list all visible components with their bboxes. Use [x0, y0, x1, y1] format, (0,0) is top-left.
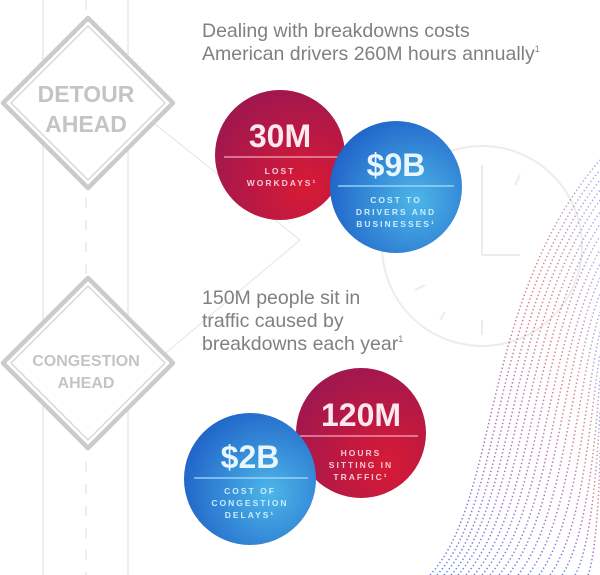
stat: 120M [296, 368, 426, 498]
sign: congestion ahead [0, 276, 176, 450]
stat: 30M: LOST [265, 166, 295, 176]
stat: 30M: WORKDAYS¹ [247, 178, 317, 188]
heading: traffic [202, 287, 403, 355]
sign: detour ahead: DETOUR [38, 81, 135, 107]
stat: $9B: COST TO [370, 195, 422, 205]
stat: 30M [215, 90, 345, 220]
heading: breakdowns cost: Dealing with breakdowns costs [202, 20, 470, 42]
stat: $9B [330, 121, 462, 253]
heading: traffic: breakdowns each year1 [202, 333, 403, 355]
stat: 120M: 120M [321, 397, 401, 433]
stat: $2B: DELAYS¹ [225, 510, 275, 520]
stat: $9B: $9B [367, 147, 425, 183]
stat: $2B [184, 413, 316, 545]
heading: breakdowns cost [202, 20, 540, 65]
dotted wave [430, 160, 600, 575]
sign: detour ahead: AHEAD [45, 111, 127, 137]
stat: 120M: TRAFFIC¹ [333, 472, 389, 482]
stat: 120M: SITTING IN [329, 460, 393, 470]
road lines [43, 0, 300, 575]
sign: detour ahead [0, 16, 176, 190]
clock face [382, 146, 582, 346]
stat: 120M: HOURS [341, 448, 381, 458]
sign: congestion ahead: CONGESTION [32, 353, 140, 370]
stat: $2B: COST OF [224, 486, 276, 496]
heading: traffic: 150M people sit in [202, 287, 360, 309]
stat: $9B: DRIVERS AND [356, 207, 436, 217]
sign: congestion ahead: AHEAD [58, 375, 114, 392]
stat: $9B: BUSINESSES¹ [356, 219, 436, 229]
heading: traffic: traffic caused by [202, 310, 344, 332]
stat: $2B: $2B [221, 439, 279, 475]
heading: breakdowns cost: American drivers 260M hours annually1 [202, 43, 540, 65]
stat: 30M: 30M [249, 118, 311, 154]
stat: $2B: CONGESTION [211, 498, 289, 508]
